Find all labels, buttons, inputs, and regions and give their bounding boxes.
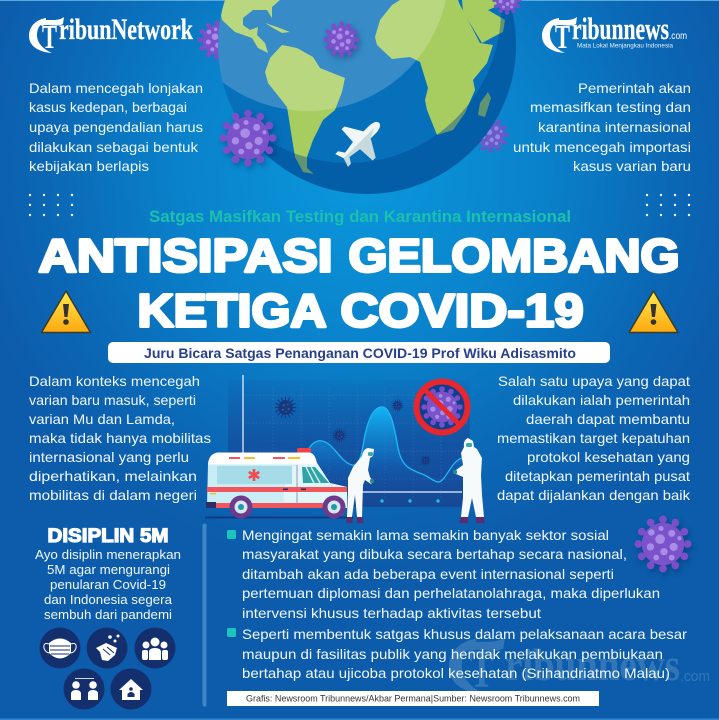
virus lower right	[636, 517, 690, 571]
logo: Tribun Network: T	[42, 19, 57, 56]
text block: middle left	[29, 373, 211, 503]
illustration: globe	[218, 0, 516, 194]
text block: bullet points: Seperti membentuk satgas khusus dalam pelaksanaan acara besar	[242, 626, 687, 642]
bullet marker 2	[227, 628, 236, 637]
text block: top right	[513, 80, 691, 174]
credit bar	[227, 691, 599, 706]
watermark	[449, 637, 710, 699]
text block: middle right: Salah satu upaya yang dapat	[498, 373, 690, 389]
text block: middle right: ditetapkan pemerintah pusat	[505, 468, 690, 484]
text block: middle left: mobilitas di dalam negeri	[29, 487, 197, 503]
text block: middle left: diperhatikan, melainkan	[29, 468, 197, 484]
logo: Tribun Network	[29, 13, 193, 56]
bottom edge	[0, 718, 719, 720]
text block: middle left: internasional yang perlu	[29, 449, 189, 465]
text block: middle right: dapat dijalankan dengan baik	[497, 487, 691, 503]
text block: Disiplin 5M: penularan Covid-19	[50, 577, 166, 592]
icon: warning left	[42, 291, 90, 332]
virus behind globe lower right	[474, 118, 508, 152]
heading: Disiplin 5M: DISIPLIN 5M	[48, 526, 168, 547]
logo: Tribunnews: .com	[669, 31, 687, 42]
text block: top left: kebijakan berlapis	[29, 158, 149, 174]
text block: bullet points: intervensi khusus terhadap aktivitas tersebut	[242, 605, 541, 621]
text block: middle right: memastikan target kepatuhan	[497, 430, 690, 446]
text block: Disiplin 5M: Ayo disiplin menerapkan	[35, 547, 181, 562]
text block: top right: karantina internasional	[538, 119, 691, 135]
virus top right of globe	[493, 0, 521, 14]
logo: Tribunnews	[542, 11, 687, 56]
text block: Disiplin 5M: 5M agar mengurangi	[47, 562, 170, 577]
speaker label	[108, 342, 610, 363]
icon: airplane	[326, 107, 395, 176]
title: KETIGA	[138, 284, 326, 336]
illustration: outbreak chart with ambulance and workers	[205, 375, 485, 523]
text block: middle left: varian baru masuk, seperti	[29, 392, 196, 408]
watermark: T	[470, 639, 494, 699]
icon: stay home	[110, 668, 152, 710]
text block: middle right: protokol kesehatan yang	[527, 449, 690, 465]
logo: Tribunnews: ribunnews	[572, 11, 669, 46]
icon: warning right	[629, 291, 678, 332]
chart panel	[228, 380, 470, 507]
text block: bullet points: Mengingat semakin lama semakin banyak sektor sosial	[242, 527, 609, 543]
virus large left	[221, 111, 275, 165]
worker left	[346, 448, 374, 523]
text block: bullet points	[242, 527, 687, 681]
icon: crowd	[134, 628, 176, 668]
title: COVID-19	[340, 284, 584, 336]
text block: bullet points: pertemuan diplomasi dan perhelatanolahraga, maka diperlukan	[242, 585, 660, 601]
text block: middle left: varian Mu dan Lamda,	[29, 411, 175, 427]
logo: Tribunnews: Mata Lokal Menjangkau Indonesia	[577, 42, 673, 50]
text block: bullet points: maupun di fasilitas publik yang hendak melakukan pembiukaan	[242, 646, 663, 662]
text block: Disiplin 5M: sembuh dari pandemi	[44, 607, 172, 622]
logo: Tribun Network: ribunNetwork	[59, 13, 193, 46]
virus on globe	[324, 22, 359, 57]
dots left	[29, 194, 73, 216]
text block: middle right: dilakukan ialah pemerintah	[513, 392, 690, 408]
text block: top left: upaya pengendalian harus	[29, 119, 203, 135]
text block: Disiplin 5M	[35, 547, 181, 622]
title	[38, 230, 680, 336]
vertical divider	[202, 524, 206, 706]
dark virus icons	[275, 397, 431, 466]
text block: Disiplin 5M: dan Indonesia segera	[44, 592, 173, 607]
watermark: ribunnews	[505, 639, 680, 690]
text block: top right: Pemerintah akan	[578, 80, 691, 96]
icon: washing hands	[86, 628, 128, 668]
text block: top left: dilakukan sebagai bentuk	[29, 139, 199, 155]
worker right	[453, 438, 485, 523]
text block: middle left: maka tidak hanya mobilitas	[29, 430, 211, 446]
text block: top right: kasus varian baru	[573, 158, 691, 174]
text block: bullet points: masyarakat yang dibuka secara bertahap secara nasional,	[242, 546, 627, 562]
text block: middle right: daerah dapat membantu	[526, 411, 690, 427]
text block: top left: kasus kedepan, berbagai	[29, 99, 187, 115]
title: ANTISIPASI	[38, 230, 332, 282]
title: GELOMBANG	[348, 230, 680, 282]
ambulance	[205, 448, 353, 518]
chart vertical axis	[242, 375, 244, 458]
text block: top left	[29, 80, 203, 174]
speaker label: Juru Bicara Satgas Penanganan COVID-19 Prof Wiku Adisasmito	[144, 345, 576, 361]
logo: Tribunnews: T	[555, 19, 570, 56]
text block: top left: Dalam mencegah lonjakan	[29, 80, 203, 96]
subtitle: Satgas Masifkan Testing dan Karantina Internasional	[149, 207, 571, 226]
chart curve	[308, 407, 462, 491]
text block: top right: memasifkan testing dan	[530, 99, 691, 115]
icon: mask	[40, 628, 80, 668]
text block: top right: untuk mencegah importasi	[513, 139, 691, 155]
dots right	[646, 194, 690, 216]
credit bar: Grafis: Newsroom Tribunnews/Akbar Permana|Sumber: Newsroom Tribunnews.com	[246, 694, 580, 704]
watermark: .com	[680, 668, 710, 685]
chart baseline	[350, 491, 462, 493]
icon: social distance	[64, 668, 104, 710]
icon: no virus sign	[416, 382, 468, 432]
text block: bullet points: bertahap atau ujicoba protokol kesehatan (Srihandriatmo Malau)	[242, 665, 670, 681]
text block: bullet points: ditambah akan ada beberapa event internasional seperti	[242, 566, 614, 582]
bullet marker 1	[227, 530, 236, 539]
text block: middle right	[497, 373, 691, 503]
virus behind globe left	[198, 21, 236, 59]
text block: middle left: Dalam konteks mencegah	[29, 373, 200, 389]
